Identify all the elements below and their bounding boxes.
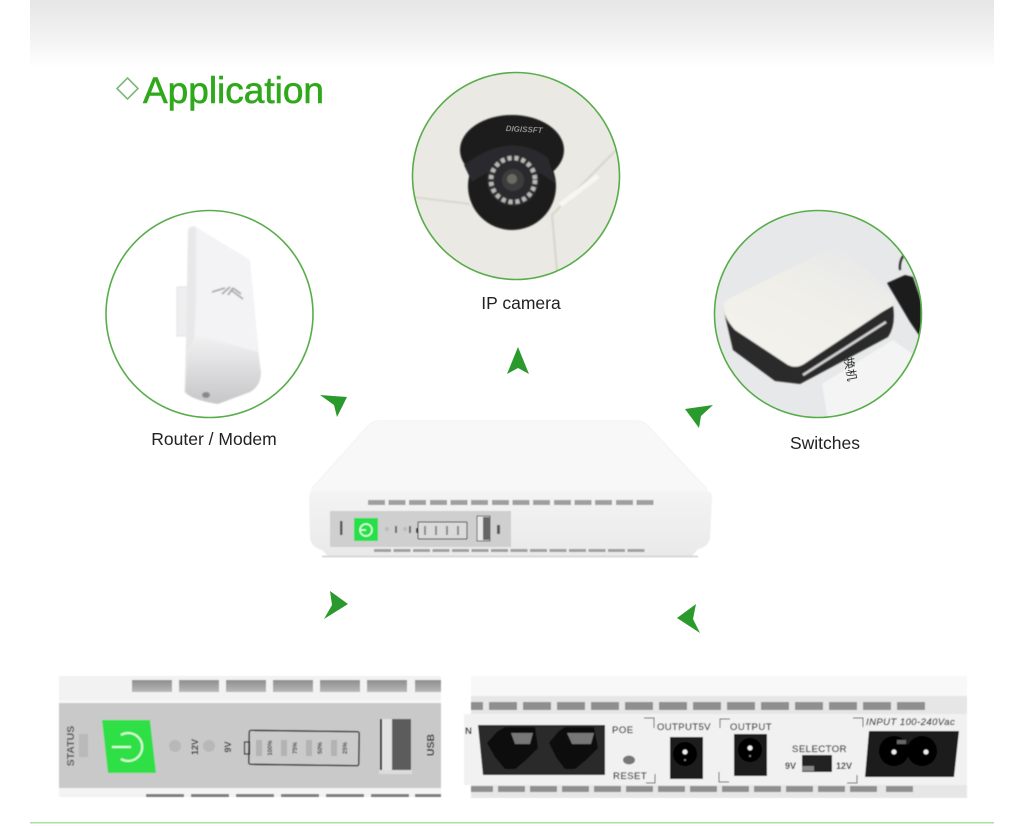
arrow: to switches [685,405,713,428]
panel: rear detail view [464,676,967,798]
panel: switches [714,210,922,420]
photo: network switch: 换机 [841,356,859,382]
device front panel [330,511,511,547]
device power button [354,518,378,541]
rear vents [471,702,925,792]
panel: front detail view: 50% [318,741,324,754]
panel: rear detail view: 9V [785,761,796,771]
output 5V: OUTPUT5V [657,722,711,733]
panel: front detail view: 12V [190,739,200,755]
label: IP camera: IP camera [481,293,561,313]
USB port [380,719,411,770]
power button [102,720,156,773]
rear faceplate [464,714,967,785]
voltage indicators [169,740,181,752]
photo: dome camera [412,72,620,282]
label: Switches: Switches [790,433,860,453]
POE and reset: POE [612,725,634,736]
selector switch: SELECTOR [792,744,847,755]
bottom green rule [30,822,994,824]
battery level meter [249,730,359,766]
photo: network switch [714,210,922,420]
panel: IP camera [412,72,620,282]
device vents [368,500,654,552]
heading: Application: Application [143,70,324,111]
panel: front detail view: 100% [268,740,274,756]
panel: router / modem [106,210,313,418]
device body [309,491,712,556]
input socket: INPUT 100-240Vac [866,717,955,728]
arrow: up to IP camera [507,347,529,374]
arrow: to bottom right detail [677,604,700,633]
panel: rear detail view: RESET [613,771,647,782]
top gradient banner [30,0,994,68]
LAN label fragment: N [465,726,472,737]
photo: outdoor router [177,226,261,404]
RJ45 sockets [478,725,605,775]
arrow: to bottom left detail [324,591,348,619]
photo: dome camera: DIGISSFT [505,124,544,135]
grey front band [59,703,441,788]
label: Router / Modem: Router / Modem [151,429,277,449]
device battery meter [418,522,467,539]
panel: front detail view: 75% [293,741,299,754]
output: OUTPUT [730,722,772,733]
arrow: to router [320,395,347,417]
panel: front detail view: 9V [223,741,233,753]
device top [312,421,707,494]
panel: front detail view: USB [425,733,437,756]
status label and light: STATUS [65,726,77,766]
product: UPS device [309,421,712,558]
vents [132,680,441,692]
panel: front detail view [59,676,441,797]
panel: front detail view: 25% [343,741,349,754]
panel: rear detail view: 12V [836,761,852,771]
device USB port [477,516,490,541]
